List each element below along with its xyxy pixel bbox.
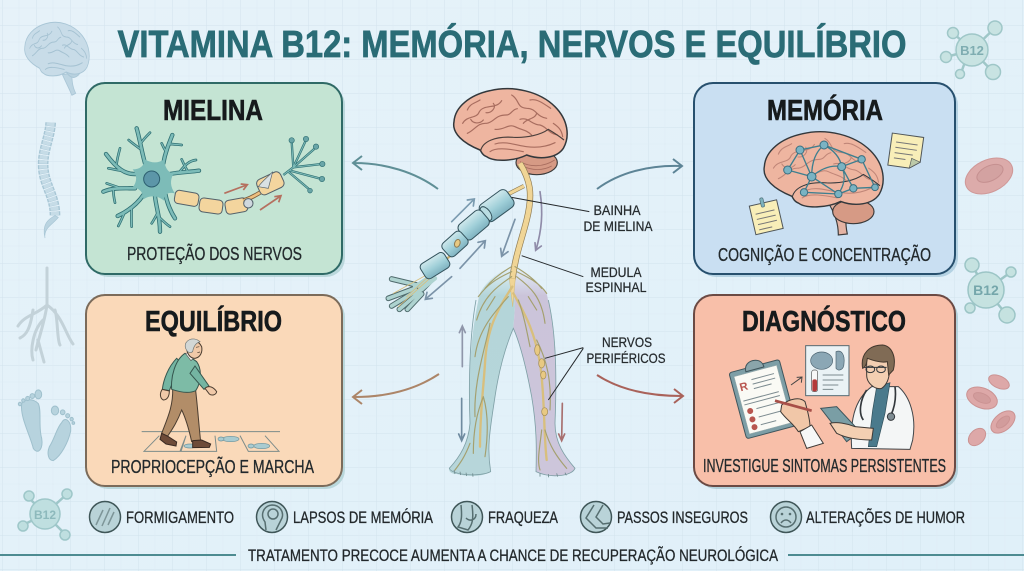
arrow: to mielina	[353, 156, 438, 189]
heading: equilibrio: EQUILÍBRIO	[145, 304, 282, 338]
label: bainha de mielina: BAINHA	[594, 202, 641, 218]
arm link	[508, 186, 524, 194]
caption: equilibrio: PROPRIOCEPÇÃO E MARCHA	[111, 456, 314, 477]
icon: brain network and notes	[748, 132, 924, 235]
panel: equilibrio	[86, 295, 345, 489]
symptom: fraqueza	[452, 502, 558, 532]
icon: ghost spine	[43, 122, 58, 238]
icon: small red blood cells	[963, 372, 1019, 449]
label: medula espinal: ESPINHAL	[586, 279, 647, 295]
heading: memoria: MEMÓRIA	[767, 93, 883, 127]
myelin sheath segments	[419, 188, 516, 280]
hand	[388, 273, 435, 309]
label: medula espinal	[586, 264, 647, 295]
label: bainha de mielina: DE MIELINA	[584, 218, 653, 234]
nerve damage patches	[535, 345, 548, 416]
icon: B12 molecule right: B12	[973, 282, 999, 298]
spinal cord	[509, 163, 530, 307]
brain	[454, 89, 567, 160]
arrow: to diagnostico	[597, 375, 683, 403]
icon: ghost footprints	[18, 390, 75, 461]
icon: B12 molecule bottom left	[18, 489, 72, 540]
symptom: alteracoes de humor: ALTERAÇÕES DE HUMOR	[806, 508, 965, 527]
symptom: fraqueza: FRAQUEZA	[488, 508, 558, 527]
symptom: lapsos de memoria: LAPSOS DE MEMÓRIA	[293, 508, 434, 527]
icon: elderly man walking	[142, 339, 280, 451]
peripheral nerves	[455, 267, 567, 470]
icon: neuron with myelin	[103, 128, 325, 232]
symptom: passos inseguros	[580, 502, 748, 532]
nerve impulse arrows	[425, 192, 565, 441]
symptom: formigamento: FORMIGAMENTO	[126, 508, 234, 527]
central figure: brain, spinal cord, legs and nerves	[388, 89, 589, 477]
icon: B12 molecule top right	[940, 21, 1002, 80]
symptom: passos inseguros: PASSOS INSEGUROS	[617, 508, 748, 527]
icon: doctor with clipboard and exams: R	[738, 381, 749, 394]
arrow: to equilibrio	[353, 374, 439, 404]
symptom: lapsos de memoria	[256, 502, 434, 532]
leader lines	[512, 197, 589, 400]
label: nervos perifericos	[586, 334, 666, 366]
icon: B12 molecule right	[965, 258, 1016, 323]
heading: mielina: MIELINA	[163, 95, 263, 127]
label: medula espinal: MEDULA	[590, 264, 642, 280]
panel: memoria	[694, 83, 958, 277]
icon: B12 molecule top right: B12	[960, 43, 984, 58]
icon: large red blood cell	[960, 151, 1018, 201]
icon: ghost brain top left	[25, 22, 89, 95]
label: nervos perifericos: NERVOS	[602, 334, 652, 350]
label: bainha de mielina	[584, 202, 653, 234]
label: nervos perifericos: PERIFÉRICOS	[586, 350, 666, 366]
caption: memoria: COGNIÇÃO E CONCENTRAÇÃO	[718, 244, 931, 265]
legs	[449, 267, 575, 477]
footer: treatment message: TRATAMENTO PRECOCE AUMENTA A CHANCE DE RECUPERAÇÃO NEUROLÓGICA	[248, 546, 779, 565]
arrow: to memoria	[597, 159, 682, 189]
cerebellum	[516, 151, 557, 175]
icon: doctor with clipboard and exams	[727, 345, 914, 449]
icon: B12 molecule bottom left: B12	[34, 508, 56, 522]
panel: diagnostico	[694, 295, 958, 489]
symptom: alteracoes de humor	[770, 502, 965, 532]
icon: ghost nerve roots	[18, 268, 73, 362]
title: VITAMINA B12: MEMÓRIA, NERVOS E EQUILÍBRIO	[118, 22, 906, 66]
symptom: formigamento	[90, 502, 234, 532]
caption: mielina: PROTEÇÃO DOS NERVOS	[127, 243, 302, 264]
panel: mielina	[86, 83, 345, 277]
heading: diagnostico: DIAGNÓSTICO	[742, 304, 906, 338]
